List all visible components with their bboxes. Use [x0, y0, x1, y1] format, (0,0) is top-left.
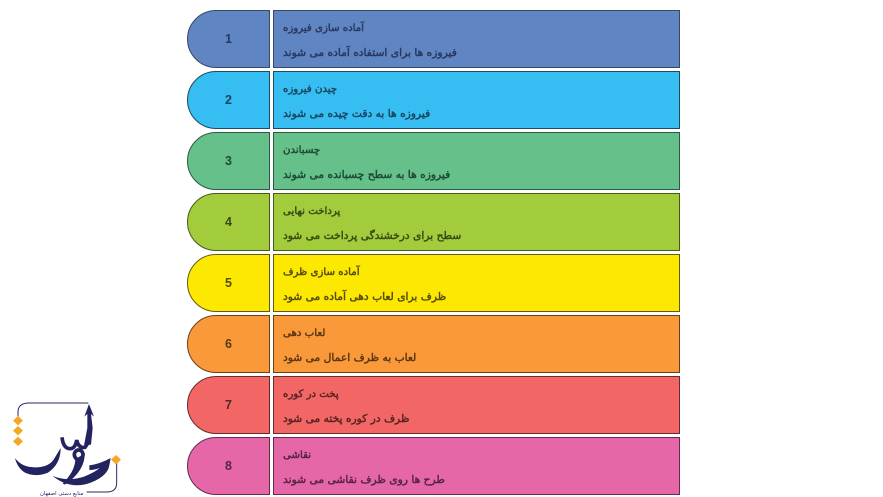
step 1 title: آماده سازی فیروزه	[283, 23, 364, 34]
step 3 title: چسباندن	[283, 145, 320, 156]
step 8 description: طرح ها روی ظرف نقاشی می شوند	[283, 472, 445, 486]
step 4 title: پرداخت نهایی	[283, 206, 340, 217]
step 8 title: نقاشی	[283, 450, 311, 461]
step 7 title: پخت در کوره	[283, 389, 339, 400]
number 7: 7	[225, 398, 232, 412]
number 6	[187, 315, 270, 373]
step 7 description: ظرف در کوره پخته می شود	[283, 412, 409, 424]
panel: step 5 text	[273, 254, 680, 312]
step 5 title: آماده سازی ظرف	[283, 267, 360, 278]
panel: step 1 text	[273, 10, 680, 68]
number 7	[187, 376, 270, 434]
logo tagline: منابع دستی اصفهان	[40, 491, 83, 497]
logo frame	[18, 403, 117, 492]
step 5	[187, 254, 680, 312]
number 5: 5	[225, 276, 232, 290]
logo	[13, 402, 121, 497]
step 2 description: فیروزه ها به دقت چیده می شوند	[283, 106, 430, 120]
step 2 title: چیدن فیروزه	[283, 84, 337, 95]
logo diamonds	[13, 416, 121, 464]
number 4: 4	[225, 215, 232, 229]
step 6	[187, 315, 680, 373]
number 8	[187, 437, 270, 495]
step 6 title: لعاب دهی	[283, 328, 325, 339]
number 1: 1	[225, 32, 232, 46]
step 7	[187, 376, 680, 434]
step 2	[187, 71, 680, 129]
number 3	[187, 132, 270, 190]
panel: step 8 text	[273, 437, 680, 495]
panel: step 2 text	[273, 71, 680, 129]
step 3	[187, 132, 680, 190]
number 3: 3	[225, 154, 232, 168]
number 8: 8	[225, 459, 232, 473]
step 6 description: لعاب به ظرف اعمال می شود	[283, 350, 416, 364]
number 4	[187, 193, 270, 251]
step 1 description: فیروزه ها برای استفاده آماده می شوند	[283, 46, 457, 58]
step 4	[187, 193, 680, 251]
number 5	[187, 254, 270, 312]
panel: step 7 text	[273, 376, 680, 434]
number 6: 6	[225, 337, 232, 351]
step 8	[187, 437, 680, 495]
number 2	[187, 71, 270, 129]
logo calligraphy	[15, 404, 111, 485]
panel: step 3 text	[273, 132, 680, 190]
step 5 description: ظرف برای لعاب دهی آماده می شود	[283, 290, 446, 302]
step 4 description: سطح برای درخشندگی پرداخت می شود	[283, 228, 461, 242]
step 1	[187, 10, 680, 68]
number 1	[187, 10, 270, 68]
panel: step 6 text	[273, 315, 680, 373]
step 3 description: فیروزه ها به سطح چسبانده می شوند	[283, 168, 450, 180]
number 2: 2	[225, 93, 232, 107]
panel: step 4 text	[273, 193, 680, 251]
